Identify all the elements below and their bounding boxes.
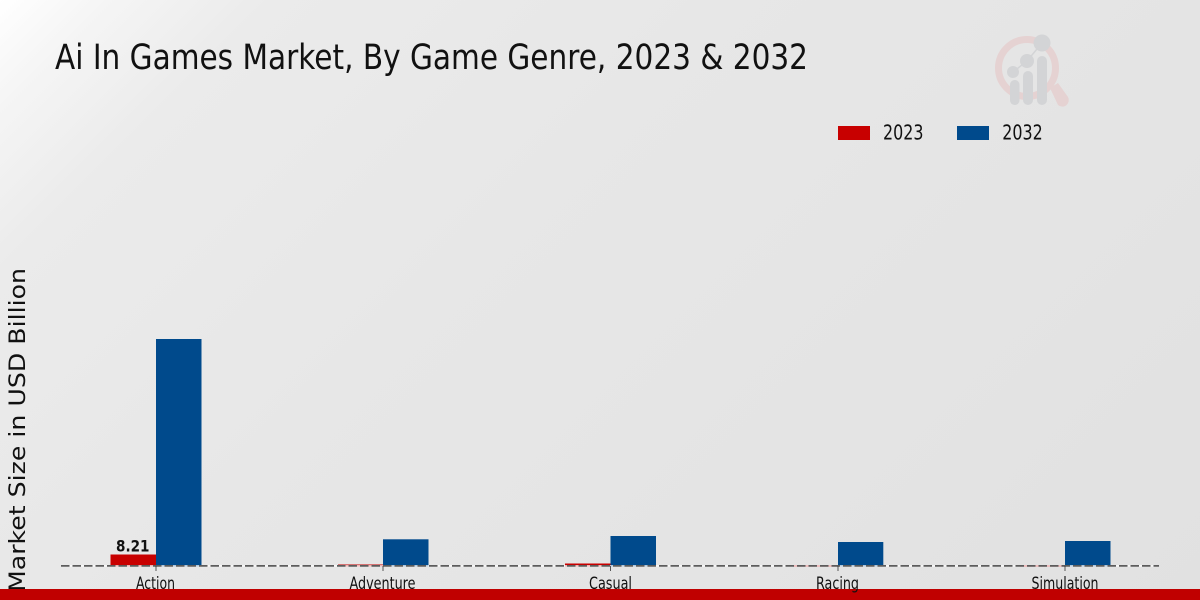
x axis labels: Casual (589, 574, 632, 593)
x axis labels: Racing (816, 574, 859, 593)
legend (838, 120, 1043, 144)
legend item: 2023 (838, 120, 924, 144)
x axis labels: Simulation (1032, 574, 1098, 593)
legend item: 2032: 2032 (1002, 120, 1043, 144)
group: Racing (793, 542, 883, 567)
group: Simulation (1020, 541, 1110, 567)
x axis baseline (61, 565, 1159, 567)
group: Adventure (338, 539, 428, 566)
x axis labels (136, 566, 1098, 593)
icon: watermark logo magnifier with bars (998, 34, 1069, 107)
legend item: 2023: 2023 (883, 120, 924, 144)
x axis labels: Adventure (350, 574, 416, 593)
title: Ai In Games Market, By Game Genre, 2023 & 2032 (55, 38, 808, 78)
x axis labels: Action (136, 574, 175, 593)
bar chart (110, 339, 1110, 567)
group: Casual (565, 536, 656, 566)
legend item: 2032 (957, 120, 1043, 144)
data label: 8.21: 8.21 (116, 536, 150, 555)
footer band (0, 589, 1200, 600)
y axis title: Market Size in USD Billion (5, 268, 31, 592)
group: Action (110, 339, 202, 566)
